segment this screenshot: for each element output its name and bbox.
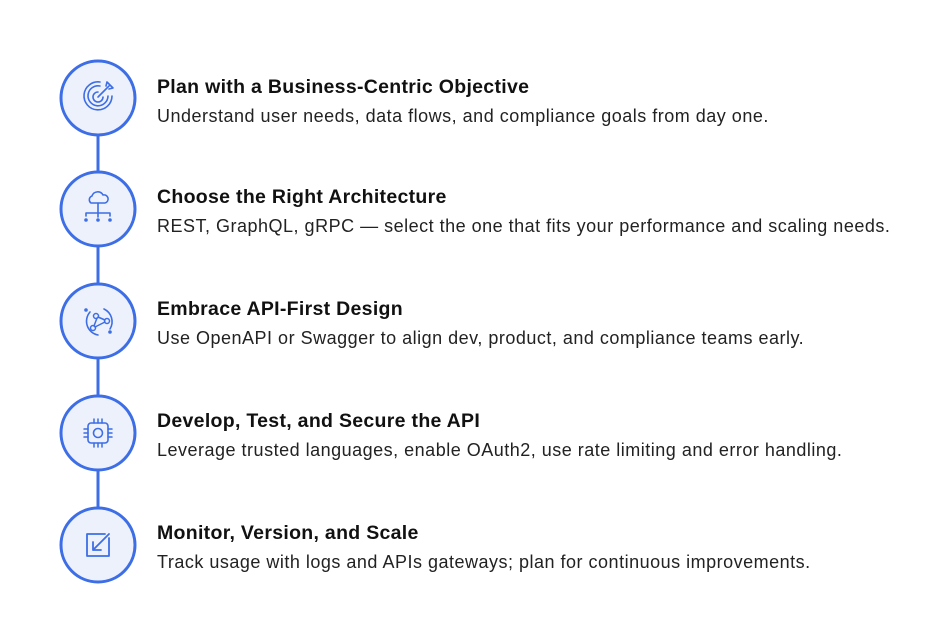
step 2 title: Choose the Right Architecture [157,186,447,208]
icon: graph step 3 [61,284,135,358]
step 5 description: Track usage with logs and APIs gateways; plan for continuous improvements. [157,552,811,572]
icon: cloud hierarchy step 2 [61,172,135,246]
step 1 description: Understand user needs, data flows, and compliance goals from day one. [157,106,769,126]
icon: target step 1 [61,61,135,135]
icon: scale arrow step 5 [61,508,135,582]
step 4 title: Develop, Test, and Secure the API [157,410,480,432]
step 3 title: Embrace API-First Design [157,298,403,320]
step 2 description: REST, GraphQL, gRPC — select the one that fits your performance and scaling needs. [157,216,890,236]
step 3 description: Use OpenAPI or Swagger to align dev, product, and compliance teams early. [157,328,804,348]
step 1 title: Plan with a Business-Centric Objective [157,76,529,98]
icon: chip step 4 [61,396,135,470]
step 5 title: Monitor, Version, and Scale [157,522,419,544]
step 4 description: Leverage trusted languages, enable OAuth2, use rate limiting and error handling. [157,440,842,460]
